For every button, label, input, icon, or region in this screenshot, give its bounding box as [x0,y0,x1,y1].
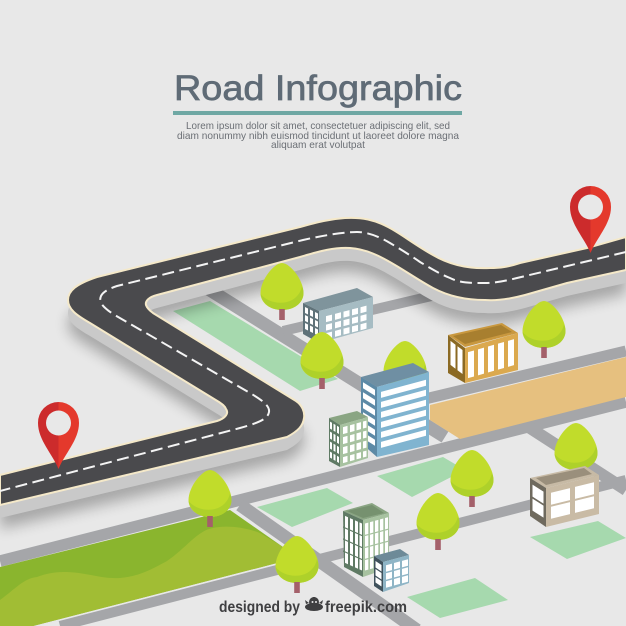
description text [177,120,459,151]
freepik credit [219,597,407,616]
small blue building [374,549,409,592]
tree centre [450,450,494,507]
tree near top of road [260,263,304,320]
icon: freepik logo [305,597,323,611]
freepik credit: freepik.com [325,599,407,616]
orange building [448,323,518,383]
street network [0,287,626,626]
tall green building [343,503,389,577]
beige building [530,466,599,527]
road surface [0,218,626,505]
road shadow [0,242,626,529]
description text: aliquam erat volutpat [271,139,365,151]
road centre dashes [0,232,626,491]
freepik credit: designed by [219,599,300,616]
location pin: start [38,402,79,469]
description text: Lorem ipsum dolor sit amet, consectetuer adipiscing elit, sed [186,120,450,132]
road side wall [0,231,626,518]
tree above park [188,470,232,527]
winding road [0,218,626,518]
park [0,510,283,626]
tree on park corner [276,536,318,593]
city map ground: streets and lots [0,287,626,626]
orange plot [430,357,626,439]
green office building [329,411,368,467]
tree behind blue building [384,341,426,398]
tree in front of grey building [300,332,344,389]
tree by orange building [522,301,566,358]
tree behind beige building [554,423,598,480]
blue building [361,363,429,457]
lawn lots [173,301,626,618]
grey building [303,288,373,343]
title: Road Infographic [174,69,462,108]
title underline [173,111,462,115]
description text: diam nonummy nibh euismod tincidunt ut laoreet dolore magna [177,130,459,142]
tree lower centre [416,493,460,550]
location pin: end [570,186,611,253]
